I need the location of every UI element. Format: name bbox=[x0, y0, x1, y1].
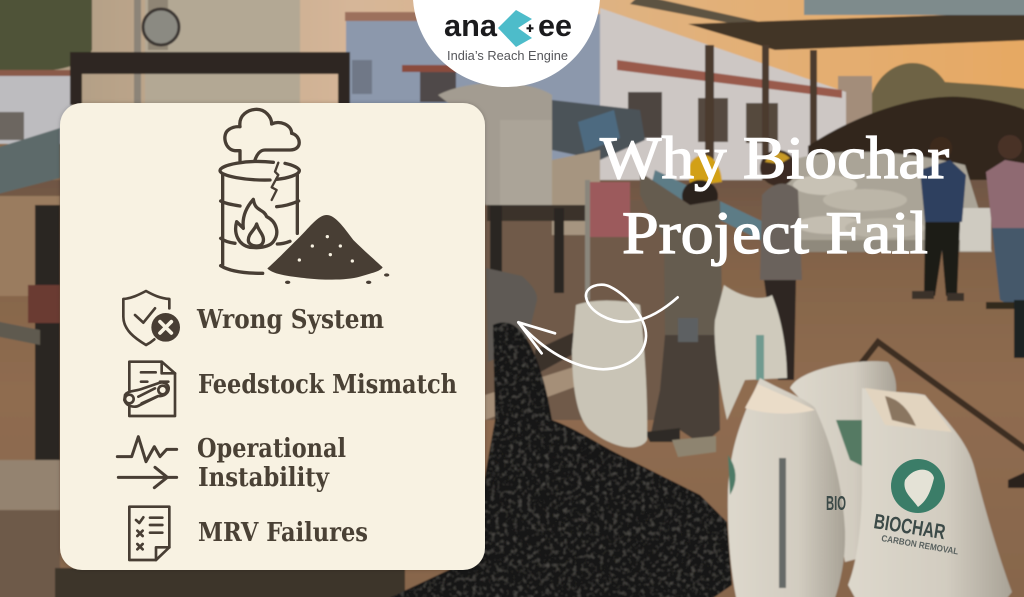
distant trees and shed right bbox=[838, 63, 1024, 130]
stacked sacks background bbox=[775, 152, 992, 252]
white building right wall bbox=[600, 0, 846, 182]
ground bbox=[0, 180, 1024, 597]
icon: pulse line and arrow bbox=[117, 437, 177, 488]
white building left bbox=[0, 70, 72, 144]
icon: shield with check and cross bbox=[123, 291, 180, 345]
title: Project Fail bbox=[622, 200, 928, 266]
arrow: hand-drawn loop pointing at the chute bbox=[518, 285, 678, 369]
logo teal diamond mark bbox=[498, 10, 534, 47]
title: Why Biochar bbox=[600, 125, 949, 191]
sack label: biochar text: BIOCHAR bbox=[872, 510, 947, 544]
silver reactor cylinder bbox=[438, 83, 645, 205]
back sack label: BIO bbox=[826, 493, 846, 515]
diagonal steel pipe bbox=[860, 342, 1024, 455]
label: wrong system: Wrong System bbox=[196, 305, 384, 335]
sack label: biochar text: CARBON REMOVAL bbox=[881, 533, 960, 557]
title bbox=[600, 125, 949, 266]
charcoal stream and pile bbox=[370, 322, 732, 597]
sack label: leaf emblem bbox=[891, 459, 945, 513]
left conveyor and machinery bbox=[0, 128, 60, 597]
panel background bbox=[60, 103, 485, 570]
sack back center bbox=[790, 361, 896, 562]
worker 1 in yellow helmet bbox=[640, 155, 722, 457]
label: operational instability: Operational bbox=[197, 434, 346, 464]
logo tagline: India’s Reach Engine bbox=[447, 48, 568, 63]
label: operational instability: Instability bbox=[198, 463, 330, 493]
icon: checklist document bbox=[129, 507, 169, 560]
logo wordmark: ana bbox=[444, 8, 498, 43]
logo wordmark bbox=[444, 8, 572, 43]
icon: cracked burning barrel with smoke and char pile bbox=[220, 109, 389, 284]
central blue building bbox=[345, 12, 610, 184]
logo wordmark: ee bbox=[538, 8, 572, 43]
logo badge bbox=[413, 0, 600, 87]
stack and insulation top left bbox=[70, 0, 350, 105]
label: mrv failures: MRV Failures bbox=[198, 518, 368, 548]
label: operational instability bbox=[197, 434, 346, 493]
tree top left bbox=[0, 0, 92, 72]
charcoal mound background bbox=[808, 97, 1024, 200]
logo white circle bbox=[413, 0, 600, 87]
mid yard background bbox=[485, 200, 700, 420]
white sack by worker bbox=[572, 300, 647, 447]
worker 2 bbox=[760, 150, 802, 380]
strip below panel bbox=[55, 568, 405, 597]
panel: why projects fail bbox=[60, 103, 485, 570]
discharge chute bbox=[486, 268, 537, 362]
label: feedstock mismatch: Feedstock Mismatch bbox=[198, 370, 457, 400]
sky bbox=[0, 0, 1024, 130]
icon: document with logs bbox=[124, 362, 175, 416]
standing man blue shirt bbox=[912, 137, 966, 301]
white sack with teal print bbox=[715, 285, 787, 420]
sack front right BIOCHAR bbox=[848, 388, 1012, 597]
standing man checked shirt bbox=[986, 135, 1024, 358]
table frame and conveyor bbox=[485, 150, 770, 420]
metal roof and posts bbox=[688, 0, 1024, 180]
sack front left bbox=[728, 378, 845, 597]
boot right bbox=[1008, 468, 1024, 488]
